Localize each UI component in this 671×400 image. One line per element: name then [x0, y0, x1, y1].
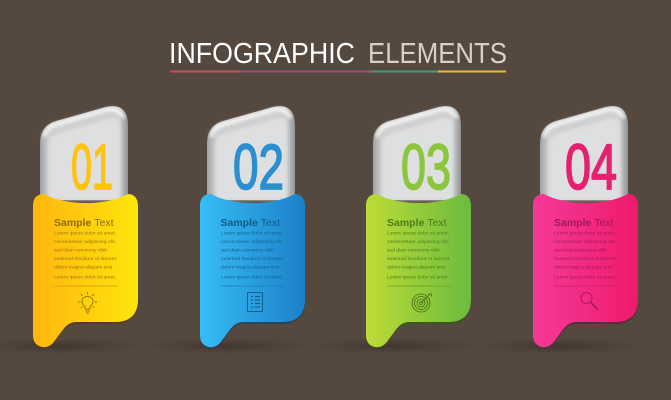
number 02: 02 [233, 131, 284, 203]
floor shadow 01 [0, 338, 145, 354]
lorem text 02: Lorem ipsum dolor sit amet, [221, 230, 283, 236]
lorem text 02: euismod tincidunt ut laoreet [221, 256, 284, 262]
divider 02 [221, 285, 285, 287]
lorem text 03: Lorem ipsum dolor sit amet. [387, 274, 449, 280]
card body 03 [366, 194, 471, 348]
panel: step 01 [0, 106, 145, 354]
divider 03 [387, 285, 451, 287]
divider 01 [54, 285, 118, 287]
icon: target [412, 294, 432, 312]
lorem text 03: dolore magna aliquam erat [387, 264, 446, 270]
lorem text 04: Lorem ipsum dolor sit amet. [554, 274, 616, 280]
lorem text 02: Lorem ipsum dolor sit amet. [221, 274, 283, 280]
number 01: 01 [71, 131, 113, 203]
sample text 02: Sample Text [220, 217, 280, 229]
lorem text 04: dolore magna aliquam erat [554, 264, 613, 270]
floor shadow 04 [475, 338, 645, 354]
card body 01 [33, 194, 138, 348]
lorem text 01: dolore magna aliquam erat [54, 264, 113, 270]
silver tab 02 [207, 106, 295, 200]
card body 04 [533, 194, 638, 348]
silver tab 03 [373, 106, 461, 200]
lorem text 04: euismod tincidunt ut laoreet [554, 256, 617, 262]
lorem text 01: euismod tincidunt ut laoreet [54, 256, 117, 262]
lorem text 01: Lorem ipsum dolor sit amet, [54, 230, 116, 236]
sample text 04: Sample Text [554, 217, 614, 229]
number 03: 03 [401, 131, 451, 203]
card body 02 [200, 194, 305, 348]
lorem text 02: sed diam nonummy nibh [221, 248, 274, 254]
lorem text 03: Lorem ipsum dolor sit amet, [387, 230, 449, 236]
floor shadow 03 [308, 338, 478, 354]
panel: step 02 [142, 106, 312, 354]
lorem text 03: sed diam nonummy nibh [387, 248, 440, 254]
lorem text 01: consectetuer adipiscing elit, [54, 239, 116, 245]
panel: step 04 [475, 106, 645, 354]
lorem text 03: euismod tincidunt ut laoreet [387, 256, 450, 262]
silver tab 01 [40, 106, 128, 200]
sample text 03: Sample Text [387, 217, 447, 229]
number 04: 04 [565, 131, 617, 203]
icon: light bulb [78, 292, 97, 313]
panel: step 03 [308, 106, 478, 354]
lorem text 03: consectetuer adipiscing elit, [387, 239, 449, 245]
sample text 01: Sample Text [54, 217, 114, 229]
floor shadow 02 [142, 338, 312, 354]
lorem text 04 [554, 230, 617, 280]
lorem text 01: Lorem ipsum dolor sit amet. [54, 274, 116, 280]
lorem text 02 [221, 230, 284, 280]
lorem text 01 [54, 230, 117, 280]
lorem text 03 [387, 230, 450, 280]
lorem text 02: consectetuer adipiscing elit, [221, 239, 283, 245]
silver tab 04 [540, 106, 628, 200]
icon: magnifier [581, 292, 598, 310]
title: ELEMENTS [368, 38, 507, 70]
lorem text 02: dolore magna aliquam erat [221, 264, 280, 270]
divider 04 [554, 285, 618, 287]
lorem text 04: Lorem ipsum dolor sit amet, [554, 230, 616, 236]
lorem text 01: sed diam nonummy nibh [54, 248, 107, 254]
title underline [170, 70, 506, 72]
title [169, 38, 507, 70]
lorem text 04: consectetuer adipiscing elit, [554, 239, 616, 245]
title: INFOGRAPHIC [169, 38, 355, 70]
lorem text 04: sed diam nonummy nibh [554, 248, 607, 254]
icon: checklist [248, 292, 262, 312]
